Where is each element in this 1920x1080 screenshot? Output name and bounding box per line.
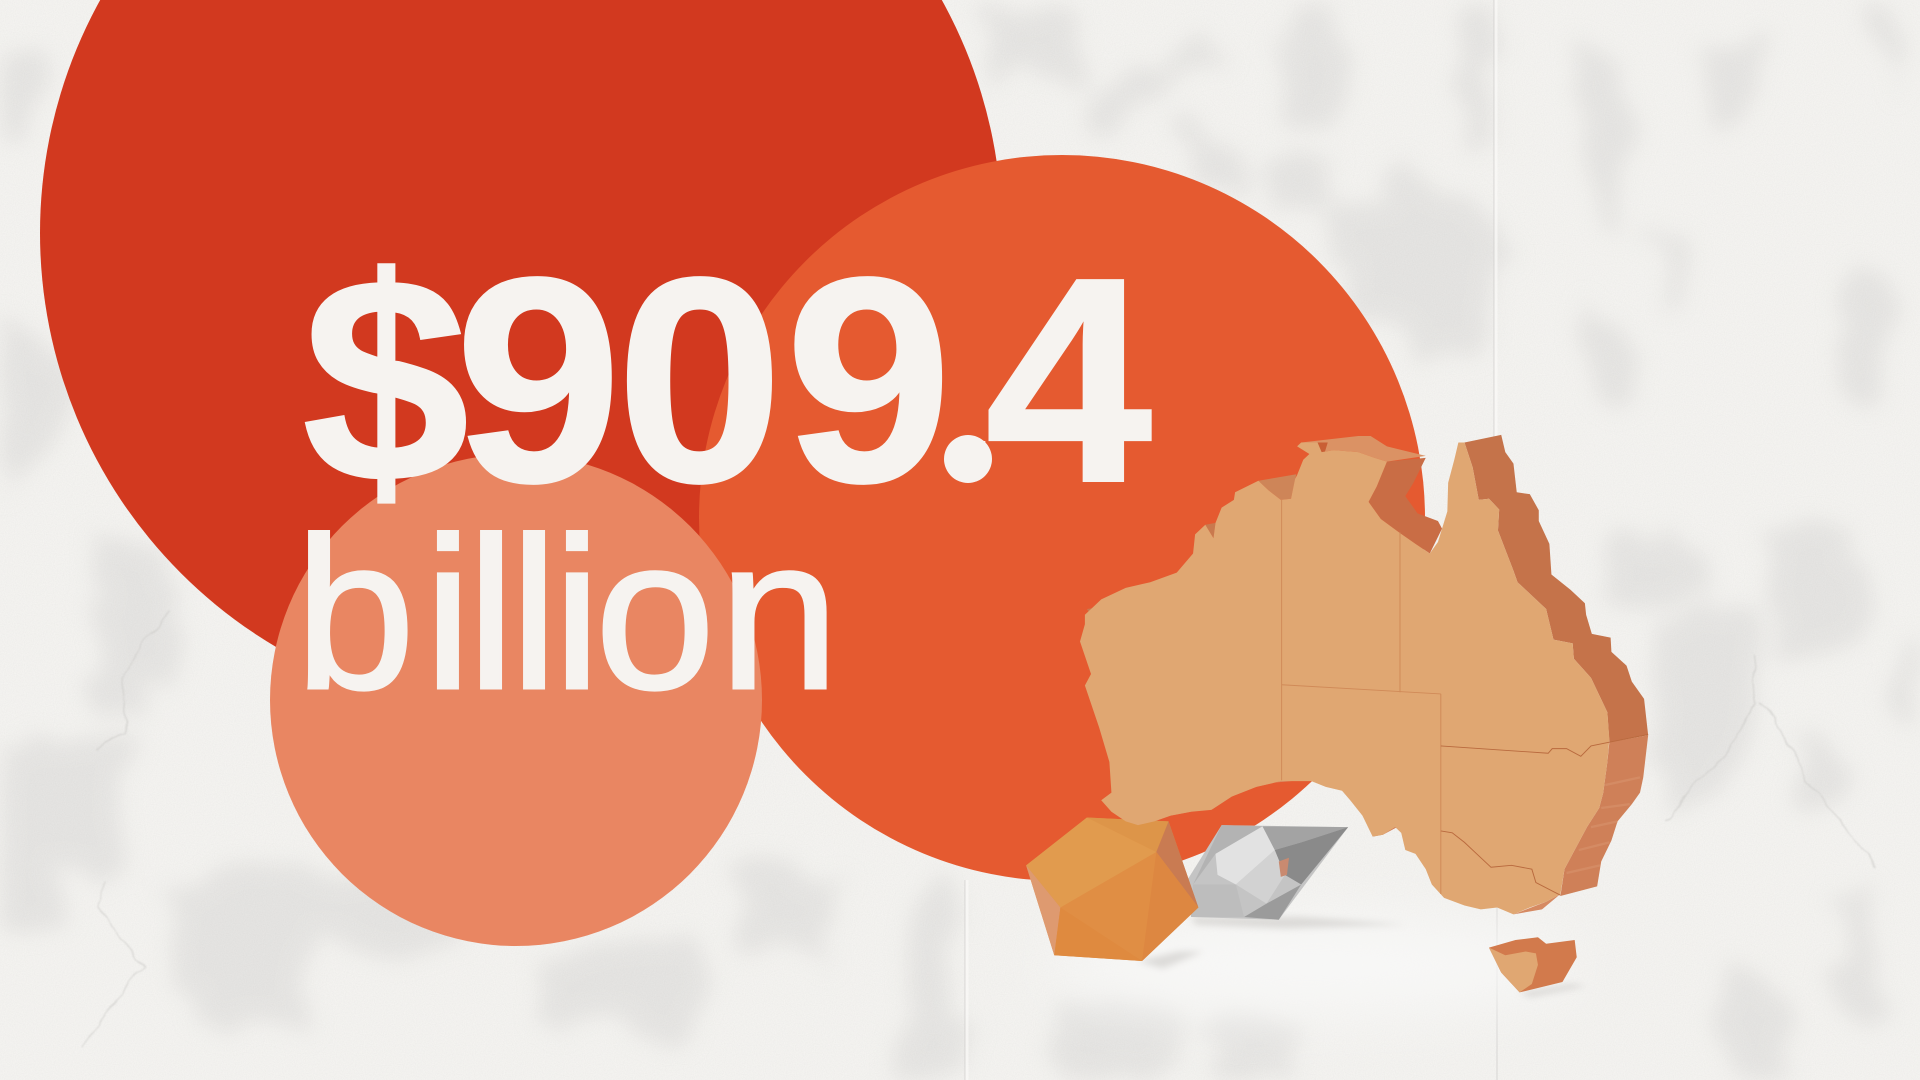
headline figure: . xyxy=(938,280,1000,520)
map top face xyxy=(1080,443,1609,914)
icon: orange icosahedron xyxy=(1026,818,1198,961)
headline unit: i xyxy=(553,492,601,734)
circle: dark red xyxy=(40,0,1002,714)
headline unit: l xyxy=(467,492,515,734)
headline figure: 4 xyxy=(985,217,1154,543)
headline figure: 9 xyxy=(455,217,622,543)
headline figure: $ xyxy=(302,217,469,543)
headline figure: 0 xyxy=(616,217,783,543)
circle: light coral xyxy=(270,454,762,946)
icon: diamond xyxy=(1187,825,1348,920)
headline figure xyxy=(302,217,1154,543)
floor glow under the 3D objects xyxy=(1050,920,1570,1010)
headline unit: l xyxy=(510,492,558,734)
state borders xyxy=(1282,500,1648,895)
map side faces xyxy=(1087,435,1648,914)
Tasmania xyxy=(1489,937,1577,992)
icon: 3D map of Australia with gem shapes xyxy=(1026,435,1648,997)
headline unit: o xyxy=(595,492,715,734)
headline unit: i xyxy=(424,492,472,734)
headline figure: 9 xyxy=(785,217,952,543)
shadows on floor xyxy=(1138,917,1587,997)
circle: orange xyxy=(699,155,1425,881)
headline unit: n xyxy=(719,492,839,734)
headline unit: b xyxy=(295,492,415,734)
